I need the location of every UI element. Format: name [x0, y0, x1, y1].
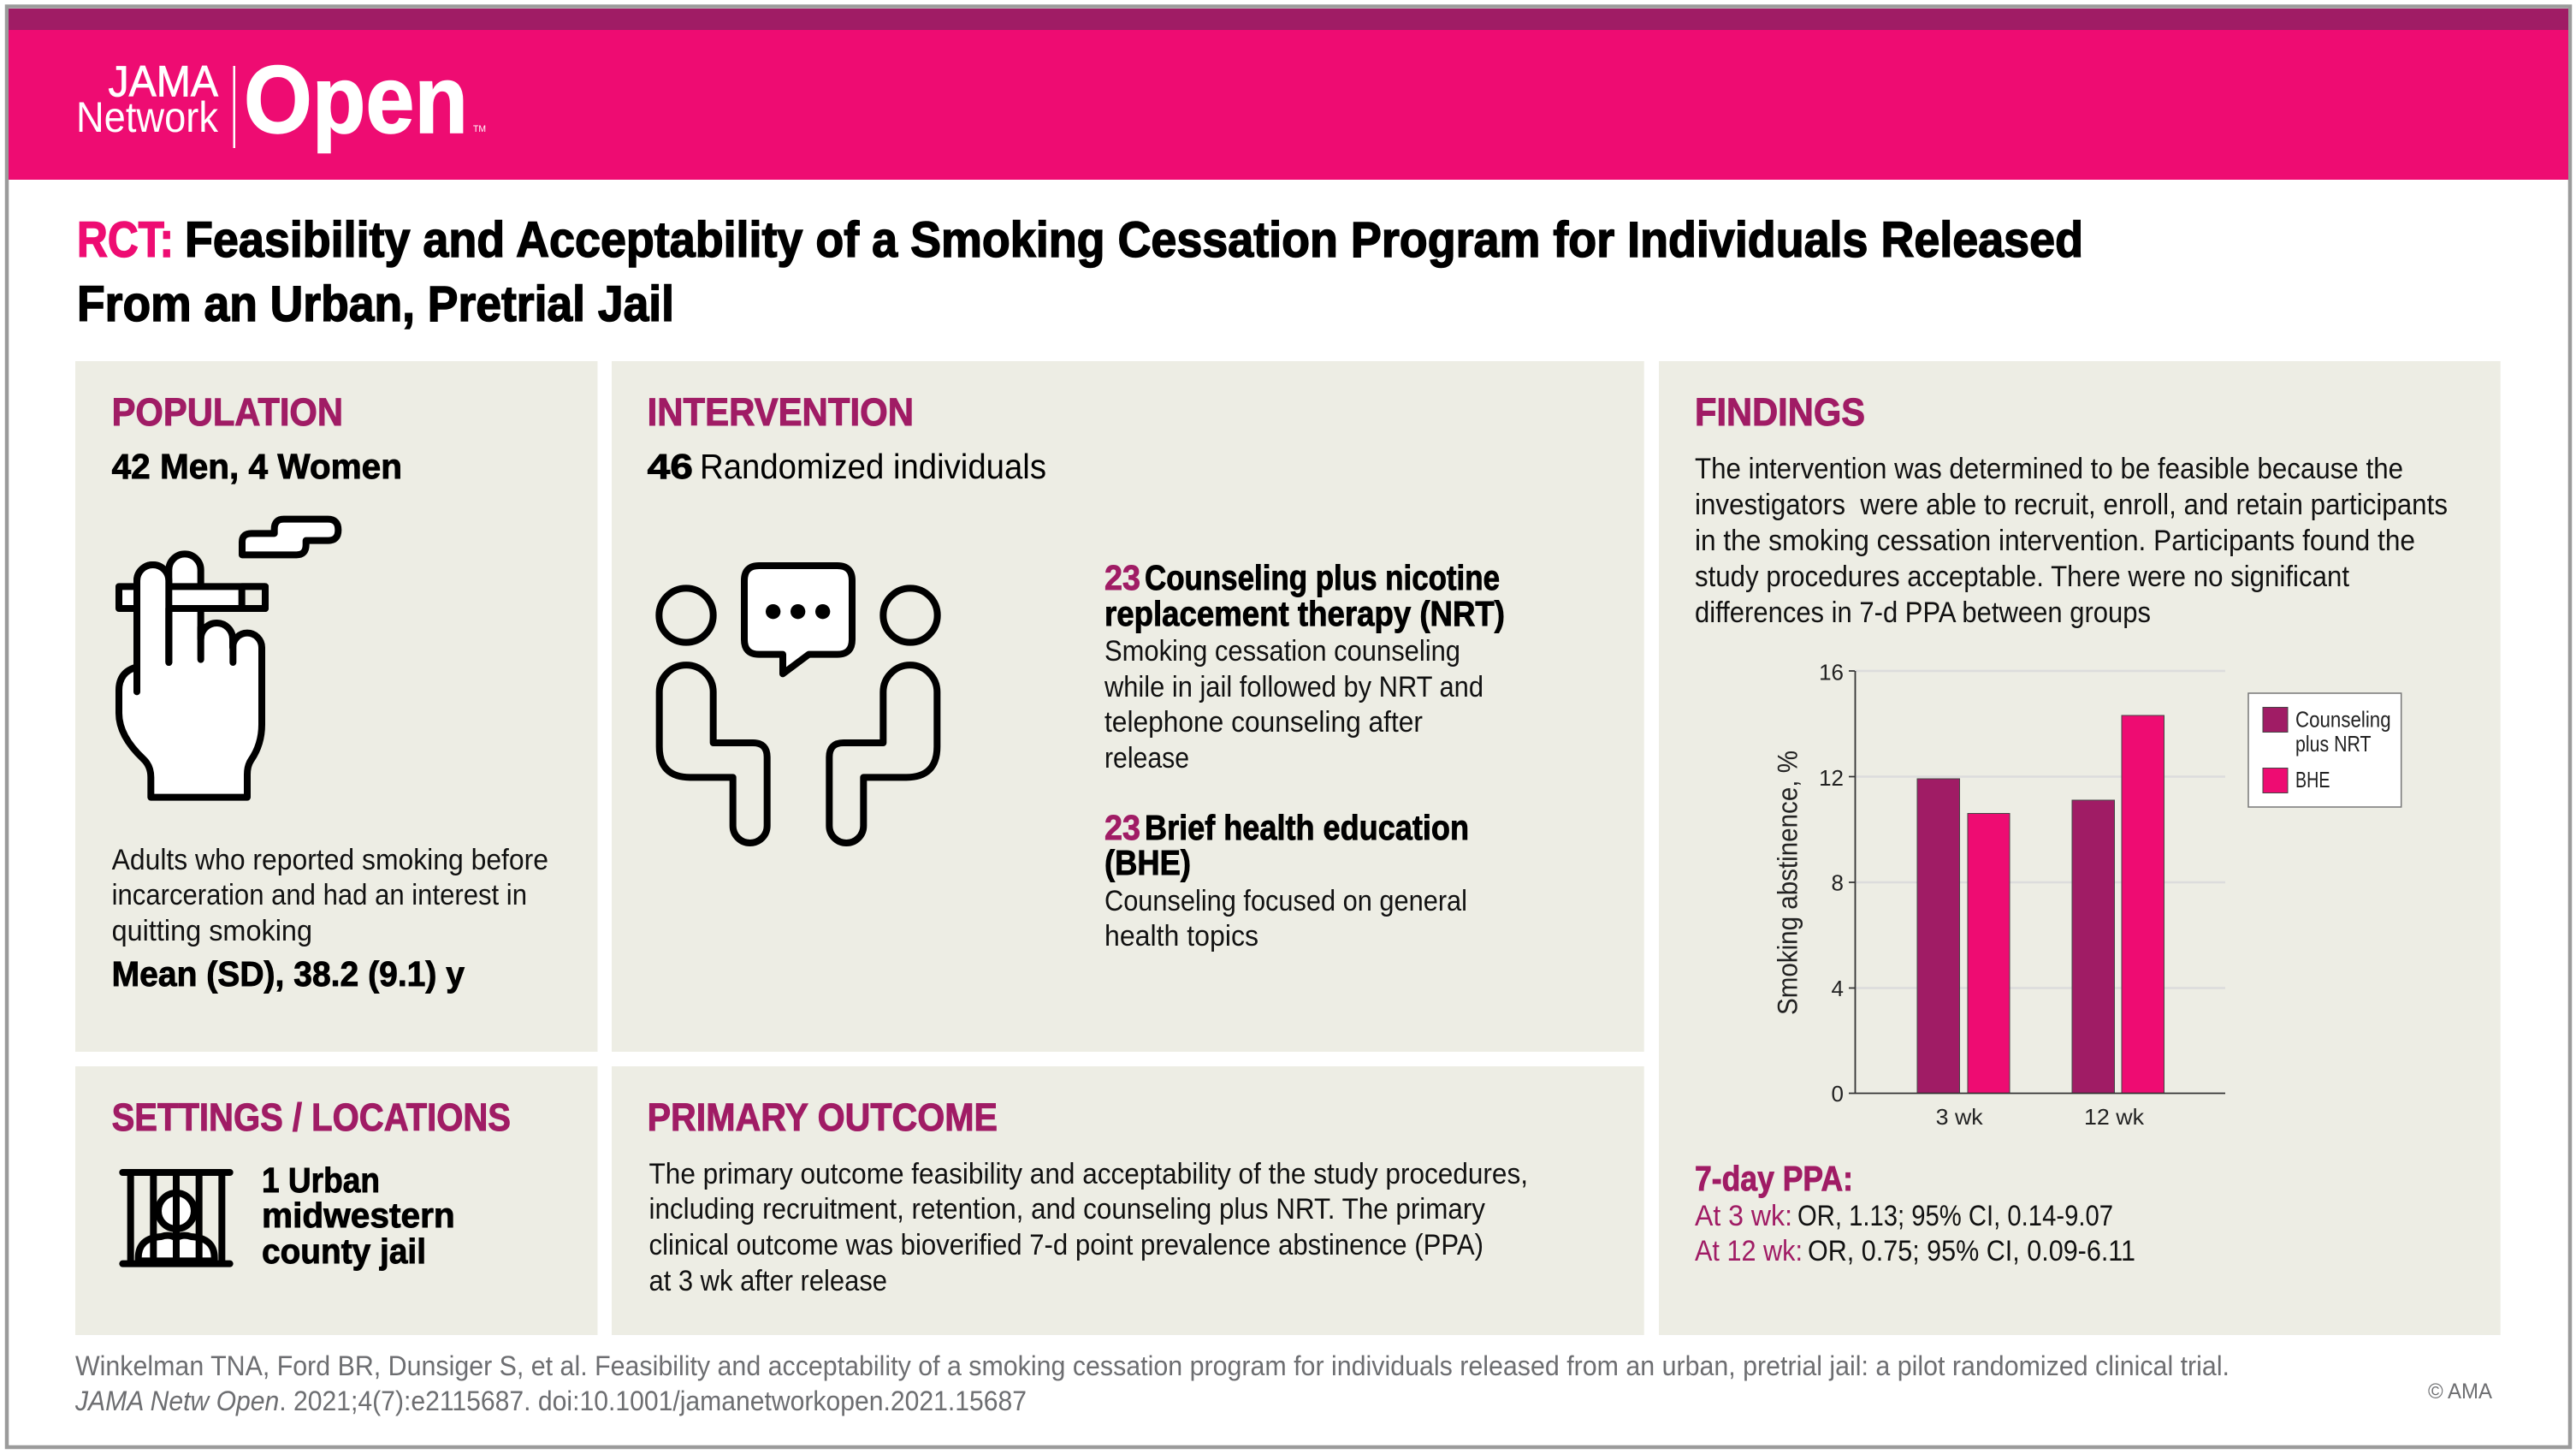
logo: JAMA Network Open: Network — [76, 93, 219, 141]
legend: Counseling — [2295, 707, 2391, 733]
y axis ticks — [1819, 659, 1844, 1107]
text: site — [262, 1160, 455, 1271]
text: outcome description: at 3 wk after release — [648, 1265, 887, 1297]
logo: JAMA Network Open: TM — [473, 124, 486, 134]
x axis labels: 12 wk — [2084, 1104, 2145, 1130]
bar chart: smoking abstinence — [1773, 659, 2401, 1130]
y axis ticks: 12 — [1819, 765, 1844, 791]
arm: brief health education: Brief health education — [1145, 808, 1469, 847]
odds ratios: 7-day PPA: At 3 wk: — [1695, 1200, 1792, 1232]
text: site: midwestern — [262, 1196, 455, 1235]
arm: counseling plus NRT: replacement therapy (NRT) — [1104, 594, 1505, 633]
icon: two people talking — [659, 566, 938, 843]
text: site: county jail — [262, 1231, 426, 1271]
title: Feasibility and Acceptability of a Smoking Cessation Program for Individuals Released — [185, 212, 2083, 268]
text: findings summary: investigators were able to recruit, enroll, and retain participants — [1695, 489, 2448, 521]
odds ratios: 7-day PPA — [1695, 1159, 2135, 1267]
heading: primary outcome: PRIMARY OUTCOME — [648, 1095, 998, 1139]
odds ratios: 7-day PPA: OR, 1.13; 95% CI, 0.14-9.07 — [1797, 1200, 2113, 1232]
title — [77, 212, 2083, 332]
panel: population — [75, 361, 597, 1052]
y axis ticks: 4 — [1832, 976, 1844, 1001]
title: RCT: — [77, 212, 174, 268]
text: population description — [112, 844, 548, 947]
odds ratios: 7-day PPA: 7-day PPA: — [1695, 1159, 1853, 1198]
arm: brief health education — [1104, 808, 1469, 953]
subheading: 42 men, 4 women: 42 Men, 4 Women — [112, 447, 402, 486]
text: findings summary: in the smoking cessation intervention. Participants found the — [1695, 525, 2415, 557]
copyright: © AMA — [2428, 1380, 2492, 1404]
y axis ticks: 8 — [1832, 870, 1844, 896]
text: outcome description: clinical outcome was bioverified 7-d point prevalence abstinence (PPA) — [648, 1229, 1483, 1261]
icon: hand holding cigarette — [119, 519, 338, 798]
heading: intervention: INTERVENTION — [648, 390, 914, 434]
text: outcome description: The primary outcome feasibility and acceptability of the study procedures, — [648, 1158, 1528, 1190]
text: findings summary — [1695, 453, 2448, 629]
heading: population: POPULATION — [112, 390, 343, 434]
text: population description: incarceration and had an interest in — [112, 879, 527, 911]
title: From an Urban, Pretrial Jail — [77, 276, 674, 332]
stat: mean age: Mean (SD), 38.2 (9.1) y — [112, 954, 465, 994]
panel: findings — [1659, 361, 2501, 1335]
text: outcome description: including recruitment, retention, and counseling plus NRT. The primary — [648, 1193, 1485, 1226]
y axis ticks: 16 — [1819, 659, 1844, 685]
odds ratios: 7-day PPA: At 12 wk: — [1695, 1235, 1803, 1267]
heading: settings: SETTINGS / LOCATIONS — [112, 1095, 511, 1139]
arm: counseling plus NRT: while in jail followed by NRT and — [1104, 671, 1483, 703]
text: outcome description — [648, 1158, 1528, 1297]
logo: JAMA Network Open: Open — [244, 46, 468, 153]
logo: JAMA Network Open — [76, 46, 486, 153]
arm: counseling plus NRT — [1104, 558, 1505, 774]
arm: counseling plus NRT: Smoking cessation counseling — [1104, 635, 1460, 668]
panel: primary outcome — [612, 1066, 1644, 1335]
legend: plus NRT — [2295, 731, 2372, 757]
x axis labels: 3 wk — [1936, 1104, 1984, 1130]
text: findings summary: differences in 7-d PPA between groups — [1695, 596, 2151, 629]
y axis title: Smoking abstinence, % — [1773, 751, 1803, 1015]
header banner — [9, 9, 2568, 180]
arm: brief health education: health topics — [1104, 920, 1258, 953]
text: findings summary: study procedures acceptable. There were no significant — [1695, 561, 2350, 593]
odds ratios: 7-day PPA: OR, 0.75; 95% CI, 0.09-6.11 — [1808, 1235, 2135, 1267]
bars — [1917, 715, 2164, 1094]
text: site: 1 Urban — [262, 1160, 380, 1200]
arm: counseling plus NRT: telephone counseling after — [1104, 706, 1423, 739]
citation: Winkelman TNA, Ford BR, Dunsiger S, et al. Feasibility and acceptability of a smoking cessation program for individuals released from an urban, pretrial jail: a pilot randomized clinical trial. — [75, 1350, 2230, 1381]
arm: counseling plus NRT: 23 — [1104, 558, 1140, 597]
arm: counseling plus NRT: Counseling plus nicotine — [1145, 558, 1500, 597]
arm: brief health education: (BHE) — [1104, 843, 1191, 882]
citation — [74, 1350, 2230, 1416]
legend — [2248, 693, 2401, 807]
subheading: 46 randomized: Randomized individuals — [700, 447, 1046, 486]
x axis labels — [1936, 1104, 2145, 1130]
panel: settings / locations — [75, 1066, 597, 1335]
panel: intervention — [612, 361, 1644, 1052]
icon: person behind bars — [122, 1172, 230, 1264]
arm: brief health education: 23 — [1104, 808, 1140, 847]
text: population description: Adults who reported smoking before — [112, 844, 548, 876]
heading: findings: FINDINGS — [1695, 390, 1865, 434]
text: findings summary: The intervention was determined to be feasible because the — [1695, 453, 2403, 485]
subheading: 46 randomized: 46 — [648, 447, 693, 486]
arm: brief health education: Counseling focused on general — [1104, 885, 1467, 917]
logo: JAMA Network Open: JAMA — [108, 57, 218, 106]
text: population description: quitting smoking — [112, 915, 312, 947]
legend: BHE — [2295, 767, 2330, 792]
arm: counseling plus NRT: release — [1104, 742, 1189, 774]
y axis ticks: 0 — [1832, 1081, 1844, 1107]
citation: JAMA Netw Open. 2021;4(7):e2115687. doi:10.1001/jamanetworkopen.2021.15687 — [74, 1386, 1027, 1416]
